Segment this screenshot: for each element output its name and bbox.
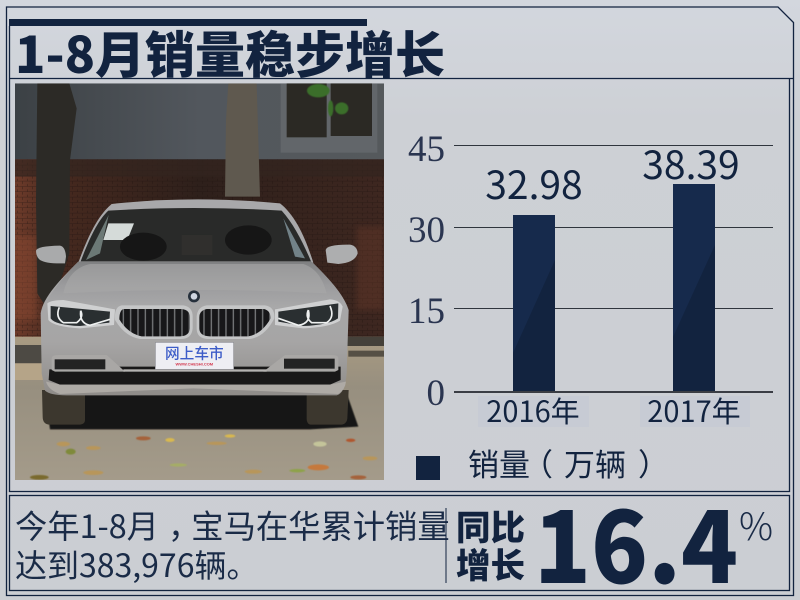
roof and pillars <box>78 199 313 263</box>
license plate: 网上车市 <box>165 343 224 364</box>
y axis labels: 0 <box>426 373 445 414</box>
tree trunk right <box>225 83 260 197</box>
brick wall <box>13 159 384 338</box>
description text: 今年1-8月 ，宝马在华累计销量 <box>15 502 450 548</box>
bar 2016 <box>513 215 555 391</box>
lower intake <box>49 355 341 385</box>
percent sign: % <box>739 496 773 551</box>
panel: main frame <box>10 26 793 492</box>
growth label: 同比 <box>456 500 525 550</box>
left headlight <box>47 300 115 328</box>
photo: silver BMW front view <box>13 83 384 480</box>
body <box>41 262 349 395</box>
lower lip <box>46 382 346 394</box>
kidney grille <box>115 305 274 339</box>
y axis labels: 30 <box>408 210 445 251</box>
title: 1-8月销量稳步增长 <box>15 16 445 88</box>
x label 2017: 2017年 <box>647 389 741 431</box>
license plate: WWW.CHESHI.COM <box>176 362 214 367</box>
title bar <box>9 19 367 26</box>
green leaves <box>307 84 348 116</box>
bar chart <box>408 129 773 431</box>
ground <box>15 337 384 480</box>
bonnet <box>52 262 339 293</box>
building wall <box>15 83 384 162</box>
right headlight <box>275 299 343 328</box>
car shadow <box>45 393 358 429</box>
description text <box>15 502 450 587</box>
BMW badge <box>188 290 200 302</box>
window <box>281 83 377 153</box>
windscreen <box>81 208 311 261</box>
panel: bottom frame <box>10 496 790 590</box>
baseline <box>454 391 773 393</box>
value 2016: 32.98 <box>485 155 583 211</box>
divider <box>445 508 447 583</box>
tree trunk left <box>36 83 77 313</box>
y axis labels <box>408 129 445 414</box>
legend: 销量（ 万辆 ） <box>468 440 669 485</box>
description text: 达到383,976辆。 <box>15 541 258 587</box>
y axis labels: 45 <box>408 129 445 170</box>
y axis labels: 15 <box>408 291 445 332</box>
bonnet highlight <box>66 264 323 284</box>
mirrors <box>36 245 358 264</box>
bar 2017 <box>673 184 715 391</box>
grid lines <box>454 146 773 308</box>
growth label <box>456 500 525 588</box>
car: BMW sedan <box>36 199 358 395</box>
growth label: 增长 <box>456 538 525 588</box>
windscreen reflections <box>86 215 305 261</box>
license plate <box>155 342 234 369</box>
tyres <box>42 390 349 425</box>
x label 2016: 2016年 <box>486 389 580 431</box>
value 2017: 38.39 <box>642 135 740 191</box>
fallen leaves <box>30 434 377 480</box>
